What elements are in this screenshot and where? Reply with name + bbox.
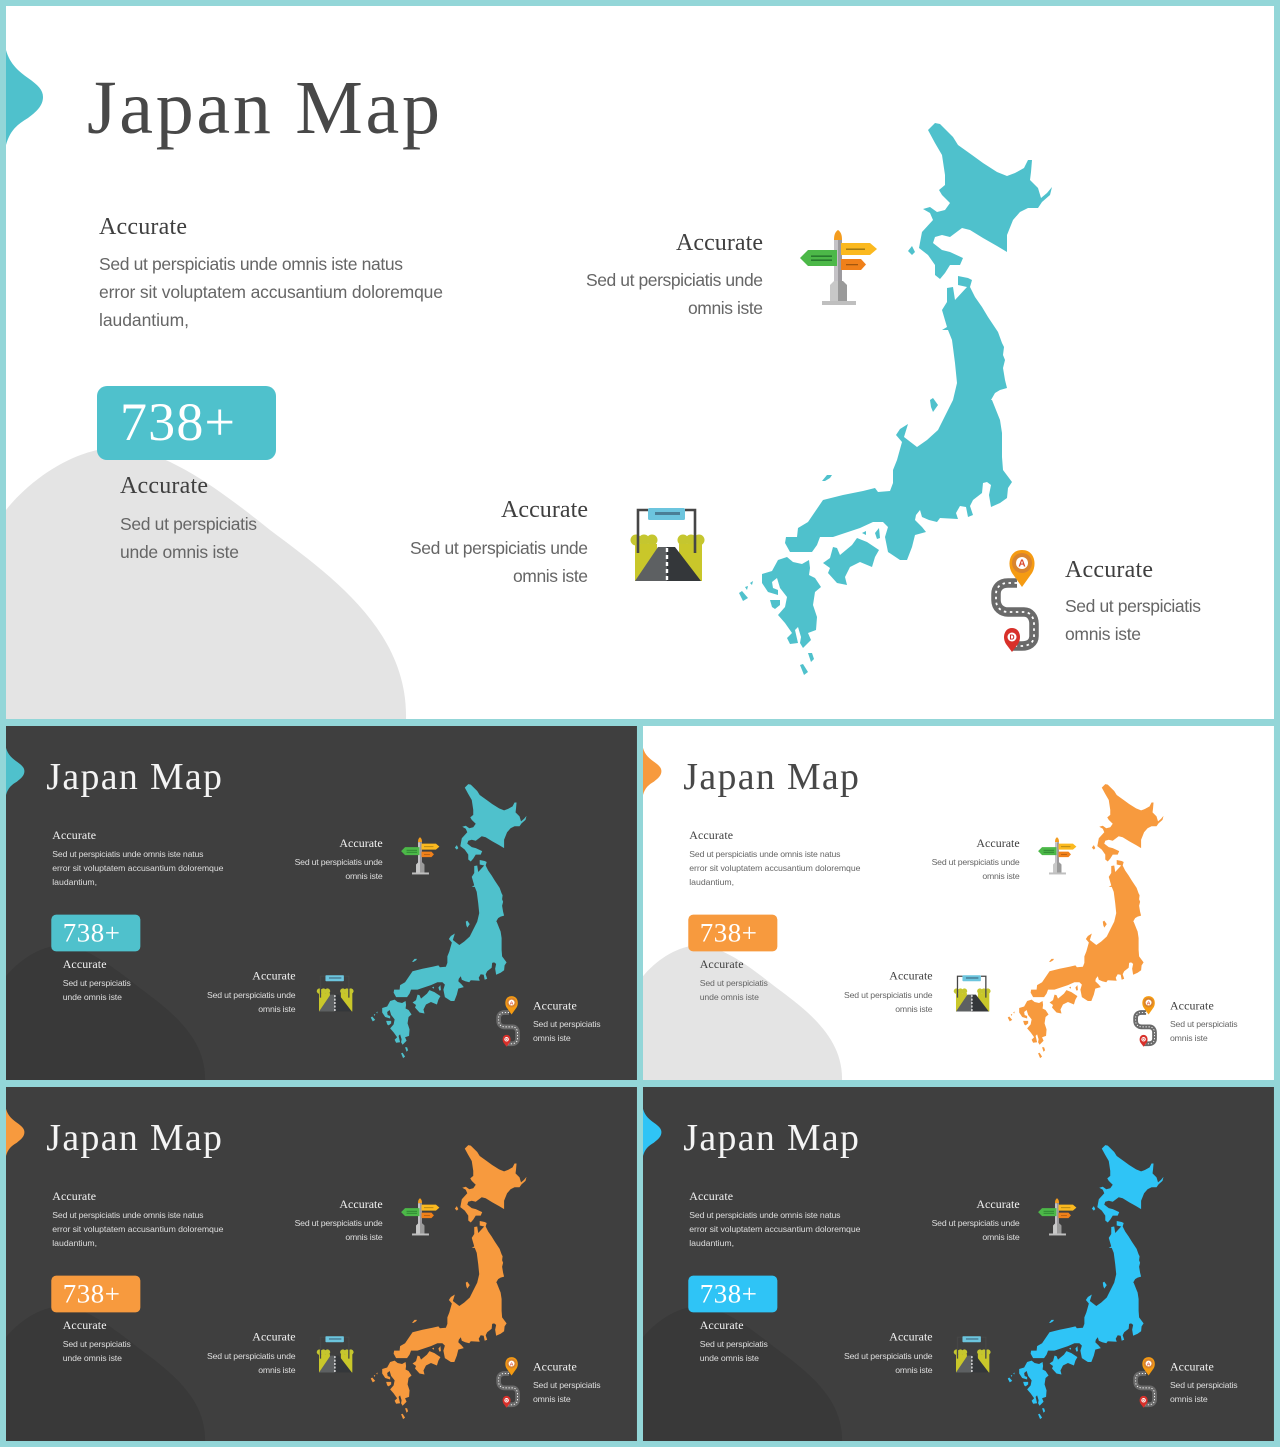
text block: road: Accurate — [252, 969, 296, 983]
stat box: 738+ — [63, 1279, 120, 1308]
icon: route: A — [1147, 1361, 1151, 1367]
text block: stat caption: Accurate — [120, 473, 208, 499]
text block: route: Accurate — [1065, 557, 1153, 583]
text block: stat caption: Accurate — [63, 1318, 107, 1332]
text block: signpost: Sed ut perspiciatis unde — [932, 857, 1020, 867]
text block: signpost: Sed ut perspiciatis unde — [932, 1218, 1020, 1228]
text block: intro: Accurate — [99, 214, 187, 240]
icon: route: A — [510, 1000, 514, 1006]
text block: route: omnis iste — [1170, 1394, 1208, 1404]
text block: signpost: Sed ut perspiciatis unde — [586, 270, 763, 290]
text block: route: Accurate — [1170, 999, 1214, 1012]
text block: stat caption: unde omnis iste — [700, 1353, 759, 1363]
text block: intro — [52, 828, 224, 887]
text block: signpost: Accurate — [976, 1197, 1020, 1211]
left side tab — [643, 748, 661, 795]
left side tab — [6, 1109, 24, 1156]
text block: road: omnis iste — [513, 566, 588, 586]
text block: intro — [99, 214, 443, 330]
icon: route: D — [505, 1038, 508, 1042]
text block: stat caption: Sed ut perspiciatis — [63, 1339, 132, 1349]
left side tab — [6, 50, 43, 145]
stat box — [51, 915, 140, 951]
text block: route: omnis iste — [533, 1033, 571, 1043]
text block: road: omnis iste — [895, 1004, 933, 1014]
text block: stat caption — [700, 1318, 769, 1363]
title: Japan Map — [87, 66, 440, 150]
gray background blob — [6, 448, 406, 719]
text block: road: Sed ut perspiciatis unde — [410, 538, 588, 558]
icon: signpost — [800, 230, 877, 305]
text block: intro: Accurate — [689, 1189, 733, 1203]
text block: intro: Accurate — [52, 1189, 96, 1203]
text block: signpost: Accurate — [676, 230, 763, 256]
text block: stat caption — [700, 957, 769, 1002]
text block: intro: laudantium, — [99, 310, 189, 330]
panel: dark blue slide — [643, 1087, 1274, 1441]
icon: signpost — [1038, 837, 1076, 874]
panel: white orange slide — [643, 726, 1274, 1080]
panel: dark orange slide — [6, 1087, 637, 1441]
text block: stat caption — [120, 473, 257, 562]
text block: intro: Accurate — [52, 828, 96, 842]
text block: signpost: omnis iste — [982, 1232, 1020, 1242]
icon: route: A — [510, 1361, 514, 1367]
text block: route — [1170, 999, 1238, 1043]
stat box: 738+ — [63, 918, 120, 947]
icon: route — [1136, 996, 1155, 1047]
text block: road: Accurate — [501, 497, 588, 523]
dark background blob — [6, 1306, 205, 1441]
icon: signpost — [401, 1198, 439, 1235]
text block: stat caption: Sed ut perspiciatis — [120, 514, 257, 534]
stat box — [97, 386, 276, 460]
icon: signpost — [1038, 1198, 1076, 1235]
text block: intro — [689, 828, 861, 887]
text block: signpost: omnis iste — [345, 871, 383, 881]
text block: signpost: omnis iste — [688, 298, 763, 318]
japan map — [1008, 1145, 1163, 1419]
text block: signpost — [295, 1197, 383, 1242]
icon: route: D — [1142, 1399, 1145, 1403]
text block: road: Accurate — [252, 1330, 296, 1344]
text block: intro: error sit voluptatem accusantium doloremque — [99, 282, 443, 302]
text block: road: omnis iste — [258, 1004, 296, 1014]
text block: intro: error sit voluptatem accusantium doloremque — [52, 863, 224, 873]
text block: stat caption — [63, 1318, 132, 1363]
text block: intro — [52, 1189, 224, 1248]
text block: intro: Sed ut perspiciatis unde omnis iste natus — [689, 1210, 841, 1220]
panel: dark teal slide — [6, 726, 637, 1080]
icon: route — [1136, 1357, 1155, 1408]
title: Japan Map — [683, 756, 859, 798]
text block: stat caption: unde omnis iste — [63, 1353, 122, 1363]
icon: route — [996, 550, 1035, 652]
text block: signpost: Accurate — [339, 836, 383, 850]
text block: intro: Sed ut perspiciatis unde omnis iste natus — [52, 849, 204, 859]
text block: route — [533, 1360, 601, 1404]
left side tab — [643, 1109, 661, 1156]
icon: route: D — [1009, 634, 1015, 642]
text block: road — [844, 969, 933, 1014]
stat box: 738+ — [120, 392, 235, 452]
text block: route: Accurate — [1170, 1360, 1214, 1373]
text block: stat caption: Sed ut perspiciatis — [700, 978, 769, 988]
icon: route — [499, 1357, 518, 1408]
text block: signpost: omnis iste — [982, 871, 1020, 881]
text block: road: Sed ut perspiciatis unde — [207, 1351, 296, 1361]
text block: intro: laudantium, — [689, 877, 734, 887]
text block: signpost: Accurate — [339, 1197, 383, 1211]
text block: route: Sed ut perspiciatis — [533, 1380, 601, 1390]
text block: road: Accurate — [889, 1330, 933, 1344]
text block: stat caption: unde omnis iste — [63, 992, 122, 1002]
japan map — [371, 784, 526, 1058]
text block: route: Sed ut perspiciatis — [1065, 596, 1201, 616]
text block: signpost — [932, 1197, 1020, 1242]
text block: road — [207, 969, 296, 1014]
gray background blob — [643, 945, 842, 1080]
text block: signpost — [586, 230, 763, 318]
text block: route: Sed ut perspiciatis — [1170, 1380, 1238, 1390]
text block: route: Accurate — [533, 1360, 577, 1373]
text block: road — [844, 1330, 933, 1375]
text block: signpost: Accurate — [976, 836, 1020, 850]
text block: intro: Sed ut perspiciatis unde omnis iste natus — [52, 1210, 204, 1220]
text block: stat caption: Sed ut perspiciatis — [700, 1339, 769, 1349]
text block: intro — [689, 1189, 861, 1248]
panel: large white teal slide — [6, 6, 1274, 719]
title: Japan Map — [683, 1117, 859, 1159]
icon: road — [317, 1336, 354, 1372]
text block: intro: error sit voluptatem accusantium doloremque — [52, 1224, 224, 1234]
icon: road — [954, 1336, 991, 1372]
text block: stat caption — [63, 957, 132, 1002]
text block: stat caption: unde omnis iste — [700, 992, 759, 1002]
stat box — [688, 1276, 777, 1312]
text block: signpost — [932, 836, 1020, 881]
text block: route — [533, 999, 601, 1043]
text block: road: omnis iste — [895, 1365, 933, 1375]
text block: signpost: Sed ut perspiciatis unde — [295, 1218, 383, 1228]
japan map — [1008, 784, 1163, 1058]
japan map — [371, 1145, 526, 1419]
dark background blob — [643, 1306, 842, 1441]
text block: intro: Sed ut perspiciatis unde omnis iste natus — [689, 849, 841, 859]
text block: intro: error sit voluptatem accusantium doloremque — [689, 863, 861, 873]
text block: stat caption: unde omnis iste — [120, 542, 239, 562]
text block: stat caption: Sed ut perspiciatis — [63, 978, 132, 988]
text block: road: Sed ut perspiciatis unde — [844, 1351, 933, 1361]
japan map — [739, 123, 1052, 675]
text block: signpost: omnis iste — [345, 1232, 383, 1242]
text block: road: Sed ut perspiciatis unde — [207, 990, 296, 1000]
text block: signpost: Sed ut perspiciatis unde — [295, 857, 383, 867]
text block: route — [1170, 1360, 1238, 1404]
text block: stat caption: Accurate — [63, 957, 107, 971]
text block: stat caption: Accurate — [700, 957, 744, 971]
icon: route: A — [1147, 1000, 1151, 1006]
text block: road: Sed ut perspiciatis unde — [844, 990, 933, 1000]
icon: road — [954, 975, 991, 1011]
text block: intro: error sit voluptatem accusantium doloremque — [689, 1224, 861, 1234]
title: Japan Map — [46, 1117, 222, 1159]
icon: route: D — [1142, 1038, 1145, 1042]
text block: route: omnis iste — [533, 1394, 571, 1404]
icon: route — [499, 996, 518, 1047]
icon: signpost — [401, 837, 439, 874]
icon: route: D — [505, 1399, 508, 1403]
text block: intro: Sed ut perspiciatis unde omnis iste natus — [99, 254, 403, 274]
icon: road — [317, 975, 354, 1011]
text block: intro: Accurate — [689, 828, 733, 842]
text block: route: omnis iste — [1170, 1033, 1208, 1043]
text block: road — [207, 1330, 296, 1375]
text block: road: omnis iste — [258, 1365, 296, 1375]
text block: stat caption: Accurate — [700, 1318, 744, 1332]
stat box: 738+ — [700, 918, 757, 947]
icon: route: A — [1018, 558, 1026, 570]
stat box — [688, 915, 777, 951]
text block: road: Accurate — [889, 969, 933, 983]
text block: intro: laudantium, — [52, 877, 97, 887]
text block: route — [1065, 557, 1201, 644]
text block: route: omnis iste — [1065, 624, 1141, 644]
left side tab — [6, 748, 24, 795]
text block: road — [410, 497, 588, 586]
text block: route: Sed ut perspiciatis — [533, 1019, 601, 1029]
text block: intro: laudantium, — [689, 1238, 734, 1248]
icon: road — [630, 508, 704, 581]
dark background blob — [6, 945, 205, 1080]
text block: route: Sed ut perspiciatis — [1170, 1019, 1238, 1029]
text block: intro: laudantium, — [52, 1238, 97, 1248]
title: Japan Map — [46, 756, 222, 798]
stat box — [51, 1276, 140, 1312]
text block: route: Accurate — [533, 999, 577, 1012]
text block: signpost — [295, 836, 383, 881]
stat box: 738+ — [700, 1279, 757, 1308]
